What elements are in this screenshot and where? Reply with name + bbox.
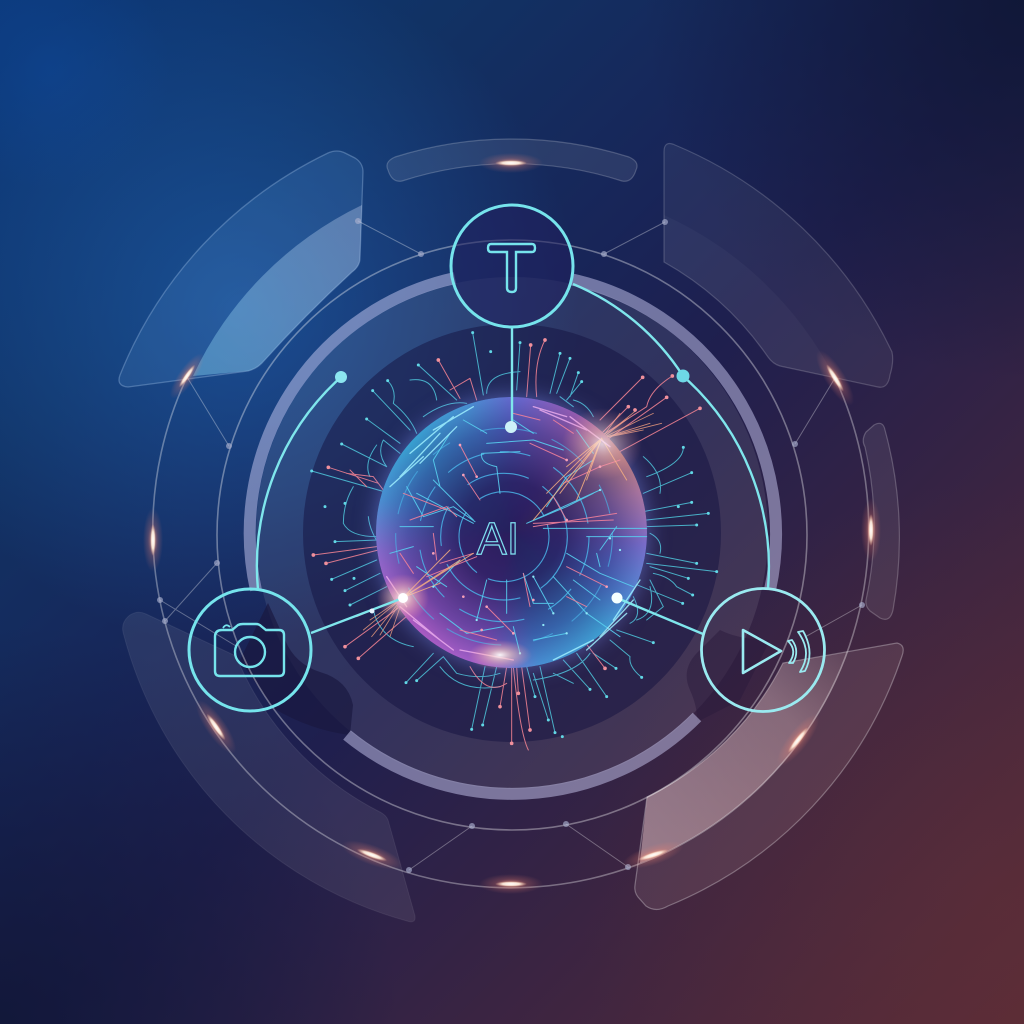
connector lines: [257, 284, 769, 634]
dark blob near play: [687, 630, 770, 722]
orange burst: [357, 410, 662, 637]
pink traces: [313, 340, 700, 750]
panel: right small: [863, 423, 899, 619]
inner pink branches: [400, 413, 620, 640]
AI label: AI: [477, 513, 519, 564]
thin ring A: [217, 240, 807, 830]
trace end dots: pink: [313, 340, 700, 743]
inner cyan branches: [390, 420, 647, 653]
flares on ring B: [143, 153, 881, 894]
icon: camera: [189, 589, 311, 711]
network connectors: [160, 221, 862, 870]
sphere globe: [376, 397, 647, 668]
panel: top: [387, 139, 637, 181]
panel: top left: [119, 151, 363, 387]
icon: text T: [451, 205, 573, 327]
hot spots on sphere: [377, 408, 642, 670]
panel: top right: [664, 144, 893, 387]
orange streaks inside sphere: [403, 438, 627, 597]
network nodes: [157, 218, 865, 873]
dark blob near camera: [240, 603, 353, 735]
cyan traces: [312, 333, 717, 733]
trace end dots: cyan: [312, 333, 717, 737]
rim highlights: [390, 407, 640, 660]
thin ring B: [153, 377, 869, 888]
sphere circuitry: [387, 407, 647, 660]
panel: bottom right: [635, 643, 903, 910]
outer circuit traces: [312, 333, 717, 750]
thick ring segments: [250, 278, 776, 794]
medium disc: [256, 277, 768, 789]
panel: bottom left: [123, 612, 415, 922]
connector dots: [335, 370, 690, 614]
sphere dots: [433, 445, 607, 633]
concentric arcs: [396, 428, 612, 645]
icon: play with sound: [702, 588, 824, 712]
dark inner disc: [303, 324, 721, 742]
